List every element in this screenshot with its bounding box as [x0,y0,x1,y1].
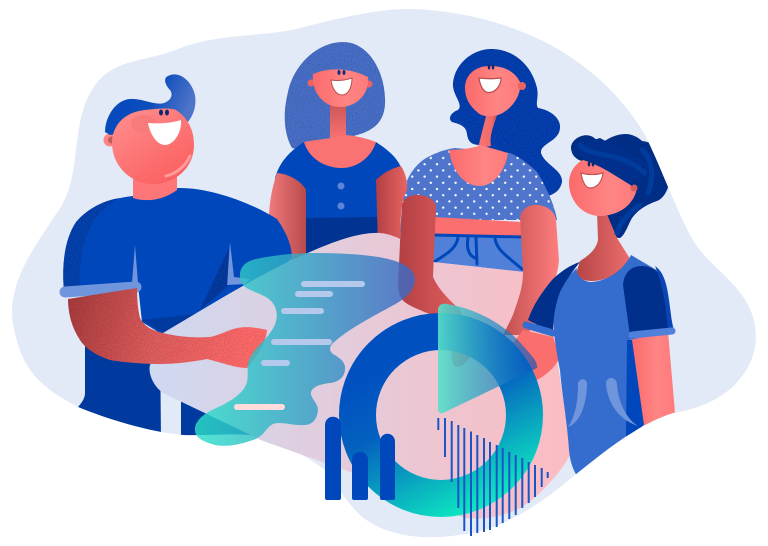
eyes [338,70,346,75]
paper sheet [150,233,571,519]
waist [306,217,378,260]
sleeve band right [632,331,672,335]
mouth [581,173,603,188]
ear [104,134,116,146]
mouth [479,78,501,93]
hair [105,74,195,135]
shade on right sleeve [655,266,673,330]
eyes [159,110,169,116]
neck [133,170,177,200]
woman with wavy hair: arms and head [398,64,559,367]
sleeve band left [526,325,553,333]
hair [285,42,385,150]
head [569,160,637,216]
chest [449,145,508,186]
ears [308,80,372,88]
ear [518,82,526,90]
bar chart [325,417,395,500]
head [313,69,368,107]
hair highlights [580,145,652,233]
boy on the right [500,134,675,480]
eyes [488,64,494,70]
man: head [104,74,195,200]
woman with wavy dark hair: back layers [402,49,562,272]
head [465,66,520,116]
left arm [269,173,306,260]
neck [478,112,498,148]
sleeve band [65,287,136,292]
pocket marks [568,378,638,427]
man: shirt [63,188,292,335]
side shadow [200,248,229,310]
buttons [338,182,344,210]
shoulder shade [63,198,120,290]
left arm [398,195,471,367]
midriff [433,217,522,238]
side strip [626,340,644,438]
neck [330,100,346,140]
hatched triangle [438,418,548,536]
right sleeve [623,266,668,332]
right arm [376,166,407,245]
right arm [631,331,675,427]
sleeve fold [132,245,138,283]
translucent teal blob [195,253,415,446]
back hair [571,134,670,238]
torso [63,188,292,335]
donut chart [358,332,524,498]
denim shorts [433,235,524,272]
right sleeve fold [227,242,250,285]
mouth [148,120,181,145]
man: arm and hand [68,288,267,368]
arms and shirt [275,142,402,250]
far hand [513,330,558,380]
pie slice [438,304,537,413]
dotted top [402,148,557,220]
face [112,108,194,184]
chest [304,135,376,168]
rim highlight [166,156,190,176]
cheek [131,115,157,133]
woman with lighter hair [269,42,407,260]
fringe [576,138,650,186]
man: legs [78,346,251,436]
mouth [331,78,352,95]
shirt body [553,255,674,480]
hair [450,49,562,197]
left sleeve [528,262,580,333]
text lines on the blob [234,281,365,410]
hem shadow [142,314,195,333]
right arm [503,205,559,335]
neck [576,212,632,281]
eyes [588,162,594,166]
ear [630,184,638,192]
